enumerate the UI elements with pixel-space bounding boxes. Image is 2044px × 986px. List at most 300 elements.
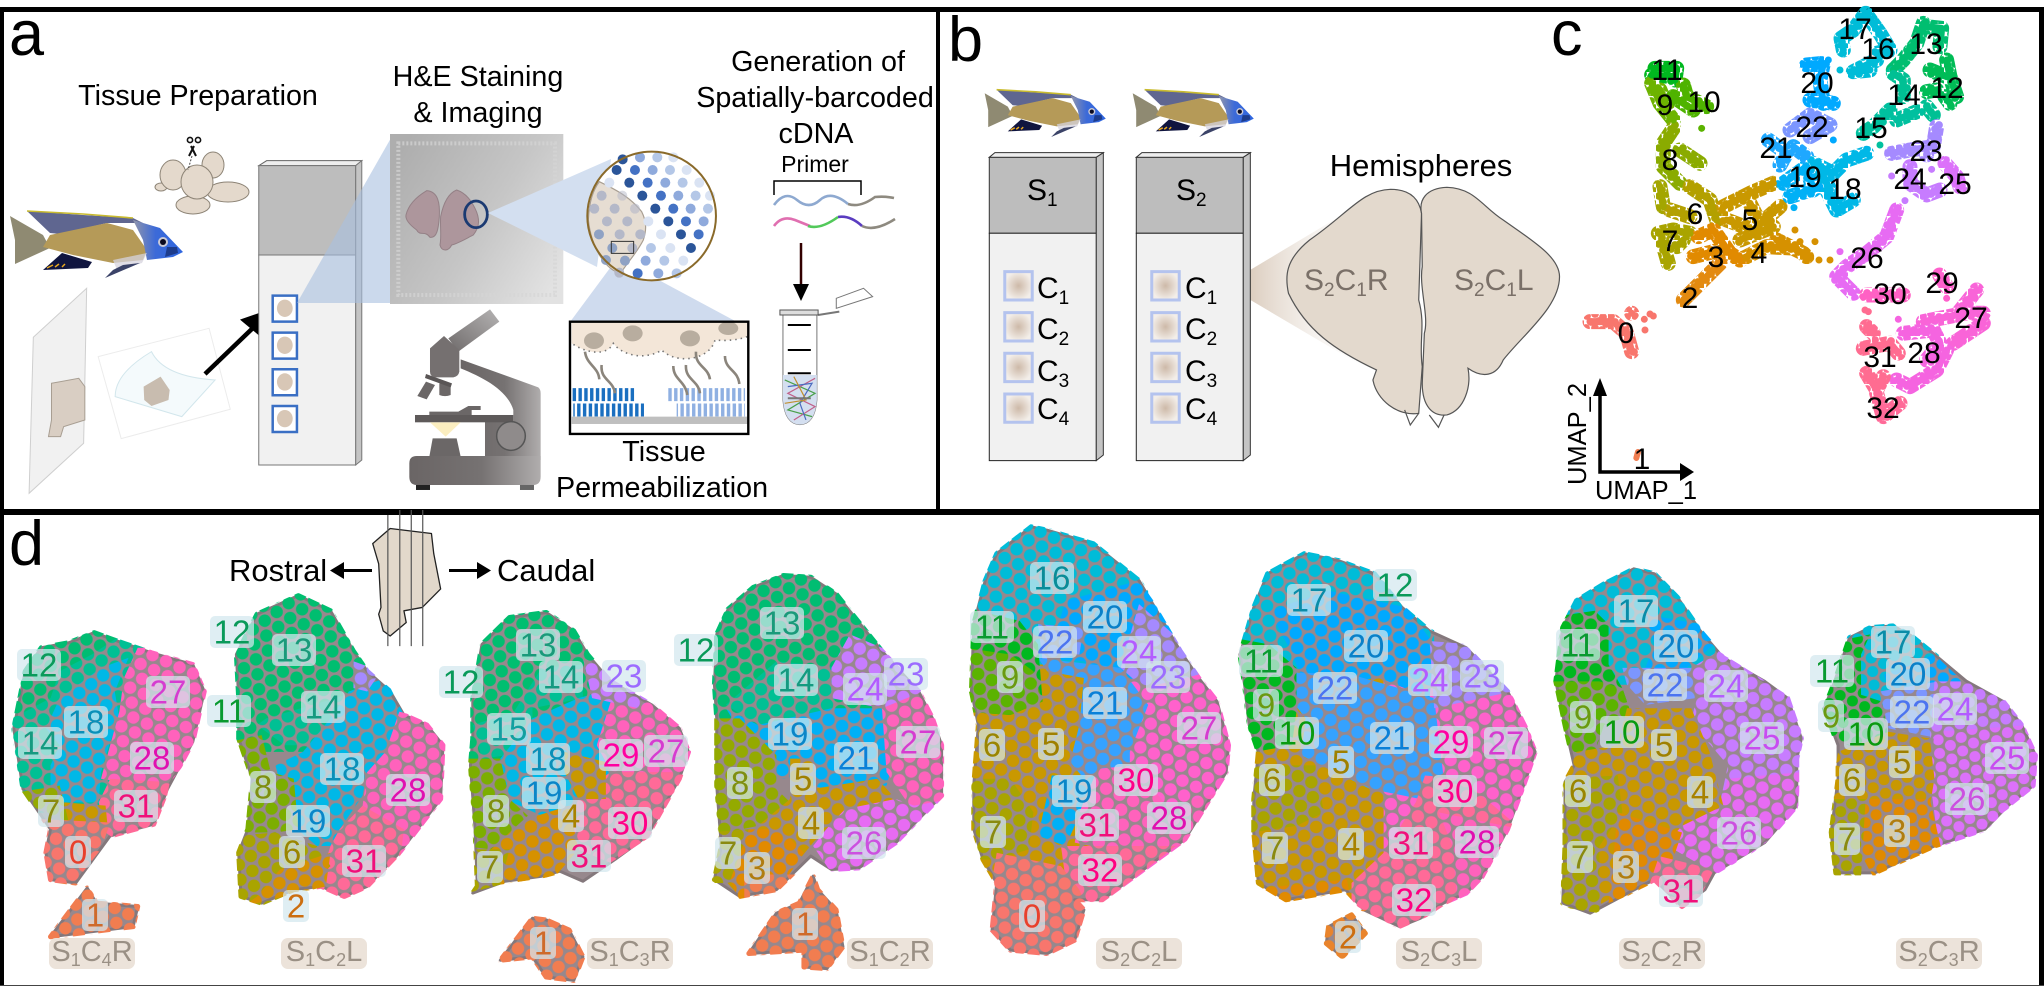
section name: 3 [1949,950,1959,970]
section name: 2 [1120,950,1130,970]
section name: C [315,936,336,968]
cluster labels: 6 [983,726,1001,764]
section name: C [1130,936,1151,968]
cluster labels: 22 [1647,666,1683,704]
cluster numbers: 16 [1861,33,1895,66]
section: S2C3R [1810,621,2044,970]
cluster labels: 5 [794,760,812,798]
section name: R [910,936,931,968]
cluster numbers: 3 [1708,241,1724,274]
cluster labels: 10 [1604,714,1640,750]
spots [703,570,951,974]
cluster labels: 23 [888,656,924,692]
cluster labels: 4 [1342,826,1360,862]
cluster labels [1239,566,1528,956]
cluster numbers: 29 [1925,267,1959,300]
section name: C [1651,936,1672,968]
section name: 2 [1151,950,1161,970]
cluster labels: 29 [603,736,639,774]
cluster labels: 22 [1894,694,1930,730]
cluster labels: 11 [212,692,246,730]
cluster labels: 30 [1437,772,1473,810]
section name [1396,936,1482,970]
magnified circle with barcoded spots [587,152,716,280]
wedge to hemispheres [1225,203,1369,370]
spots [225,591,450,910]
section name: 2 [1420,950,1430,970]
icon: brain with scissors [155,137,249,214]
section name: C [81,936,102,968]
cluster labels: 31 [118,788,154,824]
cluster numbers: 14 [1887,79,1921,112]
cluster labels: 5 [1893,744,1911,780]
heading: tissue permeabilization: Permeabilization [556,472,768,504]
cluster numbers: 5 [1742,204,1758,237]
section name [281,936,367,970]
cluster labels [1810,624,2029,858]
tissue [971,527,1229,954]
cluster labels: 5 [1042,726,1060,762]
spots [459,607,702,984]
cluster labels: 21 [1087,684,1123,722]
slide S1: C [1037,355,1059,388]
cluster labels: 19 [526,774,562,812]
icon: small fish 2 [1133,90,1254,137]
tissue [714,576,942,969]
cluster labels: 11 [1561,626,1595,664]
microscope [409,309,541,490]
slide S1: C [1037,272,1059,305]
slide S1: S [1027,174,1047,207]
rostral-caudal orientation diagram: Rostral [229,553,327,588]
slide S1: C [1037,393,1059,426]
cluster labels: 13 [276,632,312,668]
cluster labels: 6 [1843,762,1861,798]
slide S1: 1 [1059,288,1069,309]
cluster labels: 20 [1658,628,1694,664]
slide S2: C [1185,272,1207,305]
icon: tissue on film [98,328,230,439]
arrow: film to slide [205,312,265,374]
hemisphere label: left: 1 [1356,280,1367,301]
section: S2C3L [1232,544,1544,970]
slide S2: 2 [1207,329,1217,350]
cluster labels: 4 [562,798,580,834]
spots [1820,621,2044,880]
cluster labels: 9 [1822,698,1840,734]
section name: 2 [336,950,346,970]
cluster labels: 10 [1279,714,1315,752]
tissue [1240,554,1535,957]
cluster labels: 31 [1393,824,1429,862]
cluster labels: 25 [1744,720,1780,756]
cluster labels: 22 [1317,670,1353,706]
cluster labels: 5 [1655,726,1673,764]
cluster numbers: 25 [1938,168,1972,201]
slide S2: 4 [1207,409,1218,430]
cluster numbers: 9 [1657,89,1673,122]
cluster labels: 24 [1937,690,1973,728]
panel b: sampling design [948,5,1560,461]
cluster numbers: 15 [1854,112,1888,145]
panel letter d: d [9,509,44,579]
cluster labels: 3 [748,850,766,886]
cluster labels [1556,592,1784,910]
section name: 2 [900,950,910,970]
primer strands [774,196,895,228]
cluster numbers [1618,13,1988,476]
cluster labels: 27 [1181,710,1217,746]
cluster labels: 0 [69,834,87,870]
section name: S [1101,936,1120,968]
section name: S [51,936,71,968]
primer label and bracket [774,151,861,195]
cluster labels: 19 [290,802,326,840]
cluster labels: 30 [612,804,648,842]
cluster labels: 32 [1396,882,1432,918]
cluster numbers: 30 [1873,278,1907,311]
cluster labels: 31 [1079,806,1115,844]
hemisphere label: right: 2 [1474,280,1485,301]
cluster labels: 24 [847,670,883,708]
tissue [470,612,689,980]
cluster labels: 14 [778,662,814,698]
cluster labels: 19 [772,716,808,752]
cluster numbers: 20 [1800,67,1834,100]
cluster numbers: 19 [1788,161,1822,194]
UMAP axes: UMAP_2 [1564,383,1592,485]
primer label and bracket: Primer [781,151,849,177]
hemisphere label: right: C [1485,264,1506,297]
hemisphere label: left: C [1335,264,1356,297]
cluster labels: 16 [1034,560,1070,596]
cluster labels: 14 [305,688,341,726]
cluster numbers: 23 [1909,135,1943,168]
cluster numbers: 17 [1838,13,1872,46]
cluster labels: 11 [1244,642,1278,680]
section name: L [1161,936,1177,968]
cluster labels: 7 [984,814,1002,850]
cluster labels: 22 [1037,624,1073,660]
section name: 1 [305,950,315,970]
cluster labels: 31 [1663,872,1699,910]
UMAP axes: UMAP_1 [1595,477,1697,505]
section name: C [879,936,900,968]
cluster numbers: 31 [1863,341,1897,374]
section: S2C2R [1549,564,1806,970]
section name: S [286,936,305,968]
spots [1232,544,1544,964]
cluster labels: 8 [731,764,749,802]
cluster labels [674,604,940,942]
cluster labels: 19 [1056,772,1092,810]
tissue [14,633,204,937]
heading: H&E staining: & Imaging [413,97,543,129]
cluster numbers: 7 [1662,225,1678,258]
cluster labels: 6 [1263,762,1281,798]
cluster numbers: 1 [1634,443,1650,476]
cluster labels: 18 [530,740,566,778]
section name: L [1461,936,1477,968]
section: S1C2R [674,570,951,974]
slide S2: 3 [1207,371,1217,392]
hemisphere label: left: R [1367,264,1389,297]
cluster labels: 7 [1266,830,1284,866]
cluster labels: 7 [1571,838,1589,876]
zoom wedge: image to circle [488,159,611,267]
section: S1C3R [439,607,702,984]
cluster numbers: 11 [1651,54,1683,87]
icon: glass slab with tissue [29,288,87,493]
slide S2 [1136,153,1250,461]
cluster labels: 17 [1875,624,1911,660]
cluster labels [207,614,430,924]
cluster labels: 28 [1459,824,1495,860]
cluster labels: 20 [1348,628,1384,664]
section name: S [1621,936,1641,968]
zoom wedge: circle to box [570,263,737,322]
cluster labels: 25 [1989,740,2025,776]
panel c: UMAP [1551,0,1988,505]
spots [1549,564,1806,913]
slide with capture areas [259,161,362,465]
cluster labels [17,646,190,934]
heading: H&E staining: H&E Staining [393,61,563,93]
cluster labels: 21 [838,740,874,776]
slide S1: C [1037,313,1059,346]
cluster numbers: 10 [1687,86,1721,119]
cluster labels: 3 [1888,812,1906,850]
UMAP axes [1564,378,1697,505]
section name: 3 [1451,950,1461,970]
slide S2: C [1185,313,1207,346]
cluster numbers: 28 [1907,337,1941,370]
section name [1096,936,1182,970]
cluster labels: 8 [487,792,505,830]
slide S2: S [1176,174,1196,207]
hemisphere label: right: 1 [1506,280,1517,301]
section name: S [1401,936,1420,968]
cluster labels: 12 [21,646,57,684]
cluster labels: 27 [900,724,936,760]
section name: R [650,936,671,968]
cluster labels: 17 [1618,592,1654,630]
cluster labels: 7 [42,792,60,830]
cluster labels: 28 [1151,800,1187,836]
cluster labels: 3 [1617,848,1635,886]
cluster labels: 1 [534,924,552,962]
section name: C [1928,936,1949,968]
cluster labels: 5 [1332,744,1350,780]
cluster labels: 9 [1257,686,1275,724]
section name: 1 [71,950,81,970]
section name: 2 [1641,950,1651,970]
cluster labels: 1 [86,896,104,934]
cluster numbers: 26 [1850,242,1884,275]
cluster labels: 21 [1374,720,1410,756]
spots [0,624,211,943]
cluster labels [439,626,688,962]
cluster labels: 0 [1023,898,1041,934]
cluster numbers: 2 [1682,282,1698,315]
cluster labels: 27 [150,674,186,710]
cluster labels: 2 [1339,918,1357,956]
section name: S [1898,936,1918,968]
slide S1: 3 [1059,371,1069,392]
section name [1896,936,1982,970]
tube [780,288,873,425]
slide S1: 1 [1047,190,1058,211]
cluster labels: 7 [1838,820,1856,858]
cluster labels: 9 [1574,698,1592,736]
slide S2: 2 [1196,190,1207,211]
section name [847,936,933,970]
slide S2: C [1185,393,1207,426]
cluster labels: 9 [1001,658,1019,696]
cluster labels: 31 [571,838,607,874]
section name: L [346,936,362,968]
section name [49,936,135,970]
slide S1: 4 [1059,409,1070,430]
cluster labels: 27 [648,732,684,770]
cluster labels: 27 [1488,724,1524,762]
cluster numbers: 32 [1866,392,1900,425]
cluster labels: 10 [1848,716,1884,752]
cluster labels: 26 [1721,814,1757,852]
slide S1: 2 [1059,329,1069,350]
cluster labels: 6 [1569,772,1587,810]
hemisphere label: left: 2 [1324,280,1335,301]
cluster labels: 7 [481,848,499,886]
UMAP scatter clusters [1590,13,1983,458]
hemisphere label: left: S [1304,264,1324,297]
cluster numbers: 24 [1893,163,1927,196]
cluster labels: 23 [606,658,642,694]
cluster labels: 20 [1890,656,1926,692]
heading: tissue preparation: Tissue Preparation [78,80,318,112]
cluster labels: 6 [283,834,301,870]
cluster labels: 12 [678,632,714,668]
cluster labels: 11 [975,608,1009,646]
cluster labels: 17 [1291,582,1327,618]
section name: 3 [640,950,650,970]
cluster numbers: 18 [1828,173,1862,206]
icon: small fish 1 [985,90,1106,137]
cluster labels: 12 [1377,566,1413,604]
H&E image [390,134,563,304]
section name: 1 [609,950,619,970]
hemisphere label: right: S [1454,264,1474,297]
permeabilization box [570,322,748,434]
cluster labels: 14 [543,658,579,696]
cluster labels: 24 [1412,662,1448,698]
cluster labels: 26 [846,824,882,862]
tissue [236,596,443,903]
panel d: spatial maps [0,509,2044,984]
section name: 4 [102,950,112,970]
cluster labels: 12 [214,614,250,650]
brain hemispheres illustration [1287,187,1560,427]
cluster labels: 23 [1464,658,1500,694]
cluster labels: 24 [1708,668,1744,704]
section name: S [849,936,869,968]
cluster numbers: 22 [1795,111,1829,144]
heading: generation of cDNA: Generation of [731,46,906,78]
cluster labels: 18 [68,704,104,740]
cluster numbers: 13 [1909,28,1943,61]
rostral-caudal orientation diagram [229,510,595,646]
cluster labels: 4 [802,804,820,842]
zoom wedge: slide to image [297,138,391,303]
cluster labels: 29 [1433,724,1469,760]
cluster numbers: 8 [1662,144,1678,177]
section name: R [1682,936,1703,968]
cluster labels: 1 [796,906,814,942]
panel a: workflow [9,0,934,504]
slide S2: C [1185,355,1207,388]
heading: hemispheres: Hemispheres [1330,148,1512,183]
section: S1C4R [0,624,211,970]
cluster numbers: 6 [1687,198,1703,231]
section name: R [1959,936,1980,968]
slide S2: 1 [1207,288,1217,309]
cluster numbers: 21 [1759,132,1793,165]
section: S2C2L [955,520,1240,970]
cluster labels: 24 [1121,634,1157,670]
heading: generation of cDNA: cDNA [779,118,854,150]
heading: generation of cDNA: Spatially-barcoded [696,82,934,114]
section name: 2 [1672,950,1682,970]
section: S1C2L [207,591,450,970]
spots [955,520,1240,960]
cluster numbers: 12 [1930,72,1964,105]
section name [1619,936,1705,970]
tissue [1824,626,2035,873]
section name: 2 [1918,950,1928,970]
arrow: primer to tube [793,243,809,301]
cluster labels: 4 [1691,774,1709,810]
section name [587,936,673,970]
cluster labels: 2 [287,888,305,924]
cluster labels: 23 [1150,658,1186,696]
section name: C [619,936,640,968]
section name: 1 [869,950,879,970]
cluster labels: 26 [1949,780,1985,818]
cluster labels [970,560,1221,934]
rostral-caudal orientation diagram: Caudal [497,553,595,588]
cluster labels: 32 [1082,852,1118,888]
section name: S [589,936,609,968]
cluster labels: 13 [764,604,800,642]
cluster labels: 14 [22,724,58,762]
cluster labels: 13 [520,626,556,664]
panel letter a: a [9,0,45,69]
panel letter b: b [948,5,983,75]
cluster labels: 30 [1118,762,1154,798]
cluster numbers: 27 [1954,302,1988,335]
cluster labels: 31 [346,842,382,880]
section name: C [1430,936,1451,968]
cluster labels: 7 [719,834,737,872]
heading: tissue permeabilization: Tissue [622,436,706,468]
panel letter c: c [1551,0,1582,69]
cluster labels: 15 [491,710,527,748]
cluster labels: 18 [324,750,360,788]
cluster labels: 12 [443,664,479,700]
cluster numbers: 0 [1618,317,1634,350]
cluster numbers: 4 [1751,237,1767,270]
cluster labels: 28 [134,740,170,776]
